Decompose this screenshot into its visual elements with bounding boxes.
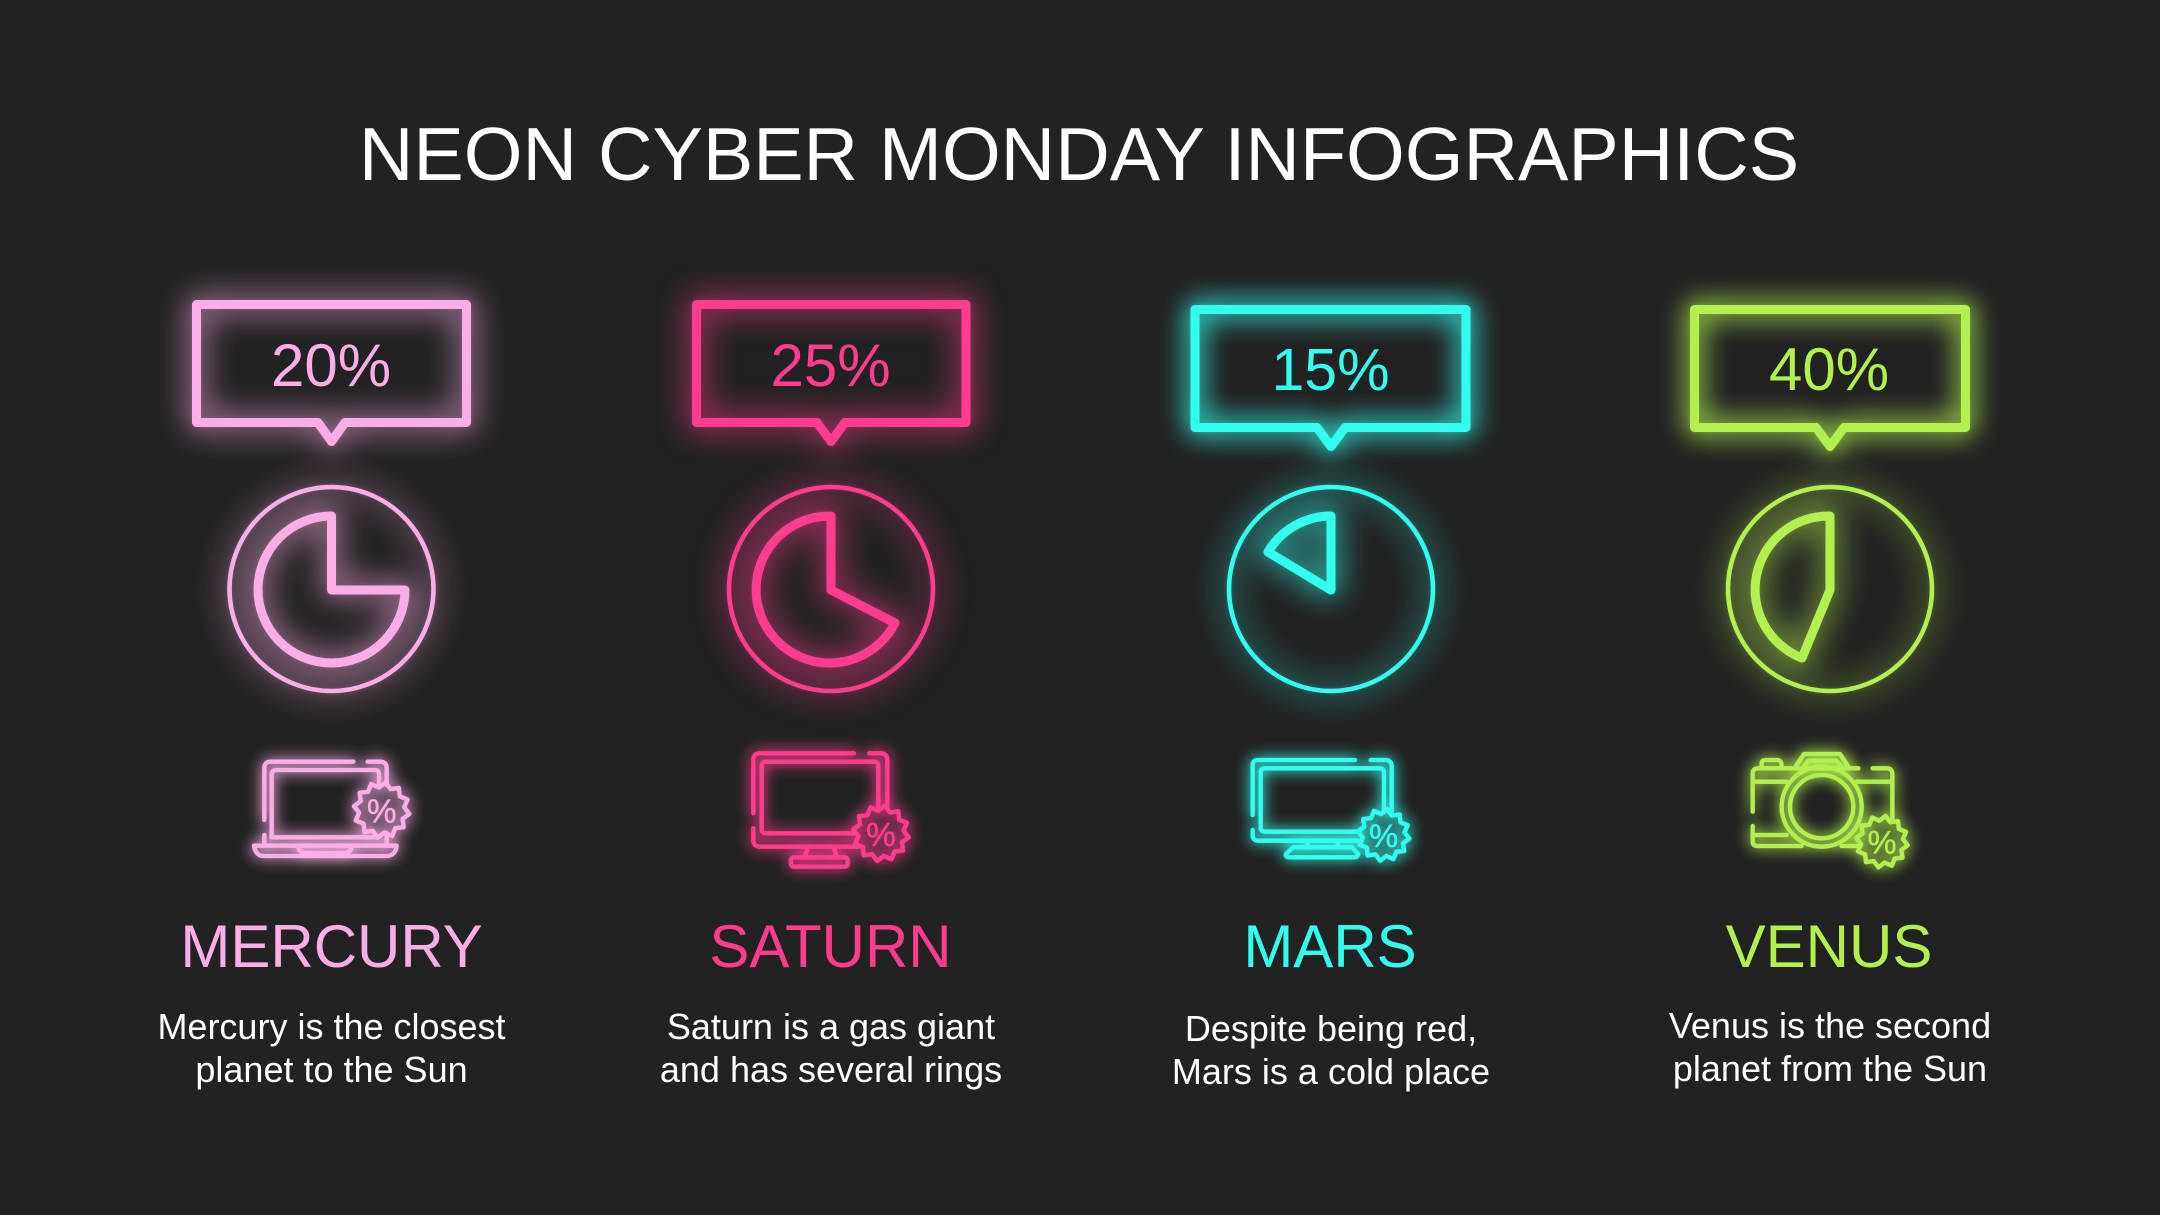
heading: venus: VENUS (1726, 913, 1932, 980)
panel: saturn (660, 304, 1002, 1090)
callout: 20% (196, 304, 466, 442)
callout: 25%: 25% (770, 332, 891, 399)
text block: mars: Despite being red, (1185, 1008, 1477, 1049)
heading: mars: MARS (1243, 913, 1417, 980)
text block: saturn: and has several rings (660, 1049, 1002, 1090)
pie chart: mars (1229, 487, 1433, 691)
panel: venus (1669, 310, 1991, 1089)
icon: widescreen monitor with discount badge (1253, 760, 1413, 864)
icon: desktop monitor with discount badge (753, 753, 913, 867)
pie chart: saturn (729, 487, 933, 691)
heading: saturn: SATURN (709, 913, 952, 980)
callout: 15%: 15% (1271, 337, 1390, 403)
text block: venus: Venus is the second (1669, 1005, 1991, 1046)
callout: 20%: 20% (271, 332, 391, 399)
text block: mercury: Mercury is the closest (157, 1006, 506, 1047)
icon: camera with discount badge (1753, 754, 1911, 871)
icon: widescreen monitor with discount badge: % (1369, 817, 1398, 854)
text block: mars: Mars is a cold place (1172, 1051, 1490, 1092)
panel: mars (1172, 310, 1490, 1092)
callout: 40%: 40% (1769, 336, 1889, 403)
callout: 40% (1694, 310, 1966, 446)
pie chart: venus (1728, 487, 1932, 691)
callout: 25% (696, 304, 966, 442)
icon: laptop with discount badge (254, 762, 413, 856)
text block: mercury: planet to the Sun (195, 1049, 468, 1090)
icon: desktop monitor with discount badge: % (866, 817, 896, 854)
heading: mercury: MERCURY (180, 913, 483, 980)
text block: saturn: Saturn is a gas giant (667, 1006, 995, 1047)
text block: venus: planet from the Sun (1673, 1048, 1987, 1089)
title: NEON CYBER MONDAY INFOGRAPHICS (359, 112, 1799, 196)
pie chart: mercury (230, 487, 434, 691)
icon: laptop with discount badge: % (367, 794, 396, 831)
callout: 15% (1195, 310, 1466, 446)
panel: mercury (157, 304, 506, 1090)
icon: camera with discount badge: % (1867, 824, 1897, 861)
